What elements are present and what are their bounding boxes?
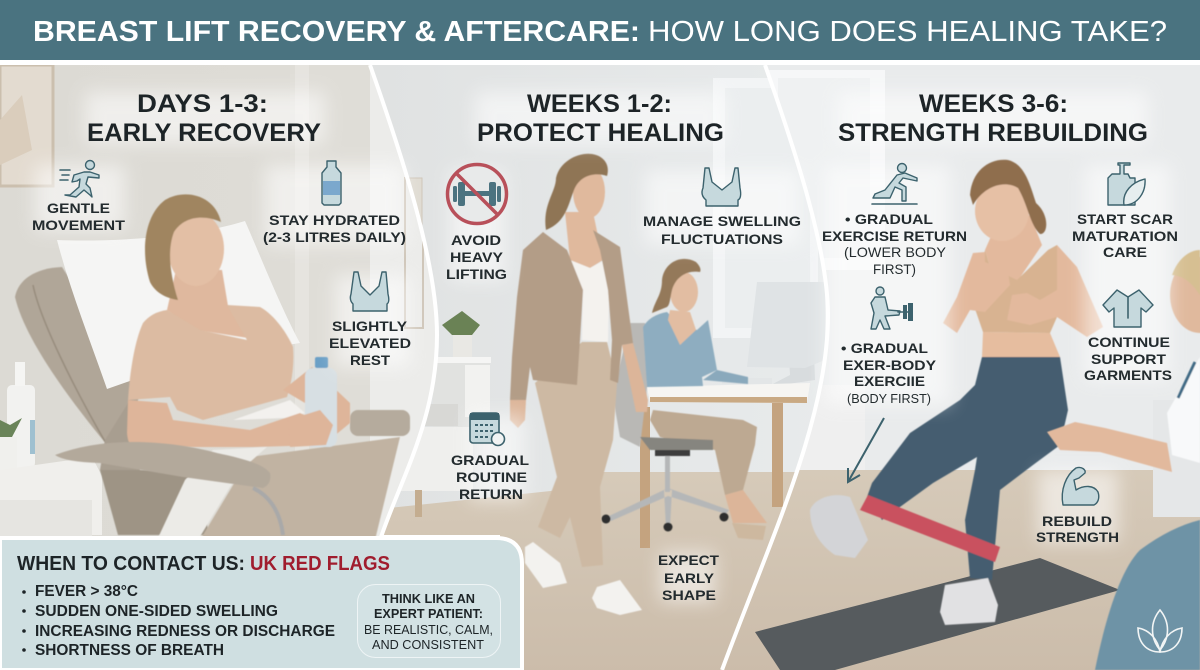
heading: days 1-3: EARLY RECOVERY xyxy=(87,119,321,147)
panel: weeks 1-2 xyxy=(370,65,840,670)
label: gradual exercise return xyxy=(822,211,967,277)
label: slightly elevated rest: REST xyxy=(350,352,390,368)
panel: days 1-3 xyxy=(0,65,440,545)
label: gentle movement: MOVEMENT xyxy=(32,217,126,233)
label: slightly elevated rest: SLIGHTLY xyxy=(332,318,408,334)
label: expect early shape: EXPECT xyxy=(658,552,719,568)
label: continue support garments: SUPPORT xyxy=(1091,351,1166,367)
label: continue support garments xyxy=(1084,334,1172,383)
icon: scar care lotion xyxy=(1108,163,1145,205)
exercise mat xyxy=(755,558,1120,670)
panel: weeks 3-6 xyxy=(720,65,1200,670)
label: gradual exercise return: • GRADUAL xyxy=(845,211,933,227)
label: manage swelling xyxy=(643,213,801,247)
label: expect early shape: SHAPE xyxy=(662,587,716,603)
logo: leaf mark xyxy=(1138,610,1182,652)
icon: water bottle xyxy=(322,161,341,205)
woman resting xyxy=(127,194,400,540)
label: gradual exer-body exercise: (BODY FIRST) xyxy=(847,391,931,406)
label: continue support garments: CONTINUE xyxy=(1088,334,1170,350)
label: gradual routine return: ROUTINE xyxy=(456,469,527,485)
callout: expert patient: EXPERT PATIENT: xyxy=(374,606,483,621)
label: gradual exer-body exercise: • GRADUAL xyxy=(841,340,928,356)
heading: days 1-3: DAYS 1-3: xyxy=(137,90,268,118)
label: rebuild strength: STRENGTH xyxy=(1036,529,1119,545)
heading: weeks 3-6: WEEKS 3-6: xyxy=(919,90,1068,118)
icon: running figure xyxy=(60,160,99,197)
label: avoid heavy lifting: LIFTING xyxy=(446,266,507,282)
label: manage swelling: FLUCTUATIONS xyxy=(661,231,783,247)
heading: weeks 1-2: WEEKS 1-2: xyxy=(527,90,672,118)
label: gradual exercise return: (LOWER BODY xyxy=(844,244,947,260)
header banner xyxy=(0,0,1200,65)
label: gentle movement xyxy=(32,200,126,233)
label: continue support garments: GARMENTS xyxy=(1084,367,1172,383)
label: gentle movement: GENTLE xyxy=(47,200,110,216)
arrow xyxy=(848,418,884,482)
woman exercising xyxy=(810,160,1103,625)
list: red flags: SUDDEN ONE-SIDED SWELLING xyxy=(35,603,278,620)
label: gradual routine return: GRADUAL xyxy=(451,452,529,468)
icon: no heavy lifting xyxy=(448,164,506,224)
heading: weeks 3-6: STRENGTH REBUILDING xyxy=(838,119,1148,147)
label: gradual routine return: RETURN xyxy=(459,486,523,502)
label: start scar maturation care: CARE xyxy=(1103,244,1147,260)
title: BREAST LIFT RECOVERY & AFTERCARE: xyxy=(33,16,640,48)
label: rebuild strength: REBUILD xyxy=(1042,513,1112,529)
recliner chair xyxy=(15,267,410,535)
label: manage swelling: MANAGE SWELLING xyxy=(643,213,801,229)
label: gradual exer-body exercise: EXERCIIE xyxy=(854,373,925,389)
icon: calendar clock xyxy=(470,413,504,446)
list: red flags: INCREASING REDNESS OR DISCHARGE xyxy=(35,623,335,640)
label: expect early shape: EARLY xyxy=(664,570,715,586)
label: stay hydrated: STAY HYDRATED xyxy=(269,212,400,228)
label: start scar maturation care: START SCAR xyxy=(1077,211,1173,227)
icon: flexed bicep xyxy=(1062,467,1099,505)
heading: days 1-3 xyxy=(87,90,321,147)
seated woman xyxy=(602,259,767,540)
panel: red flags xyxy=(0,538,522,670)
icon: support shirt xyxy=(1103,290,1153,327)
label: avoid heavy lifting: AVOID xyxy=(451,232,501,248)
callout: expert patient xyxy=(358,584,500,658)
label: stay hydrated: (2-3 LITRES DAILY) xyxy=(263,229,406,245)
physiotherapist xyxy=(1047,250,1200,670)
icon: lunge exercise xyxy=(872,164,917,204)
list: red flags: FEVER > 38°C xyxy=(35,583,138,600)
label: start scar maturation care: MATURATION xyxy=(1072,228,1178,244)
heading: weeks 1-2: PROTECT HEALING xyxy=(477,119,724,147)
list: red flags xyxy=(22,583,335,659)
list: red flags: SHORTNESS OF BREATH xyxy=(35,642,224,659)
icon: bra fluctuation xyxy=(702,168,741,206)
heading: when to contact us: WHEN TO CONTACT US: xyxy=(17,553,245,575)
callout: expert patient: BE REALISTIC, CALM, xyxy=(364,622,493,637)
label glows xyxy=(35,92,1170,602)
subtitle: HOW LONG DOES HEALING TAKE? xyxy=(648,16,1167,48)
label: start scar maturation care xyxy=(1072,211,1178,260)
heading: when to contact us: UK RED FLAGS xyxy=(250,553,390,575)
desk and monitor xyxy=(640,282,825,548)
label: slightly elevated rest: ELEVATED xyxy=(329,335,411,351)
shelf with plant xyxy=(400,311,491,517)
label: stay hydrated xyxy=(263,212,406,245)
label: expect early shape xyxy=(658,552,719,603)
label: gradual exer-body exercise xyxy=(841,340,937,406)
callout: expert patient: THINK LIKE AN xyxy=(382,591,475,606)
label: slightly elevated rest xyxy=(329,318,411,368)
armrest xyxy=(55,442,283,535)
label: avoid heavy lifting xyxy=(446,232,507,282)
standing woman xyxy=(510,154,648,615)
heading: weeks 1-2 xyxy=(477,90,724,147)
panel dividers xyxy=(370,65,828,670)
label: gradual routine return xyxy=(451,452,529,502)
label: avoid heavy lifting: HEAVY xyxy=(450,249,504,265)
label: rebuild strength xyxy=(1036,513,1119,545)
icon: support bra xyxy=(350,272,389,311)
label: gradual exercise return: FIRST) xyxy=(873,261,916,277)
side table with items xyxy=(0,362,102,536)
icon: weighted leg exercise xyxy=(871,287,913,329)
heading: weeks 3-6 xyxy=(838,90,1148,147)
pillow xyxy=(57,221,300,389)
label: gradual exer-body exercise: EXER-BODY xyxy=(843,357,937,373)
label: gradual exercise return: EXERCISE RETURN xyxy=(822,228,967,244)
callout: expert patient: AND CONSISTENT xyxy=(372,637,484,652)
